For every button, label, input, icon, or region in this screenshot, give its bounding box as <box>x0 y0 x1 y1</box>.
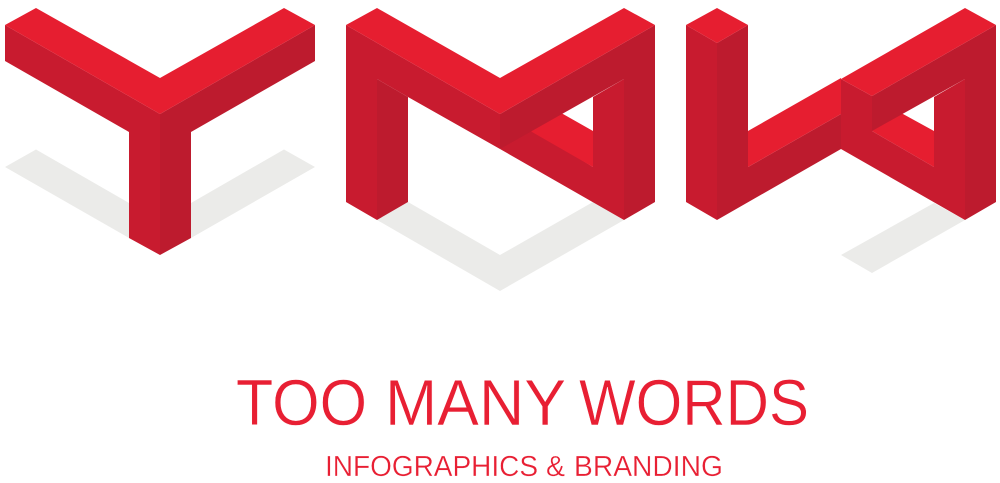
shadow: M letter <box>377 202 624 291</box>
isometric letter Y <box>5 8 315 255</box>
subtitle: & <box>546 451 565 483</box>
shadow: 4 letter <box>841 203 965 273</box>
title: TOO <box>236 366 367 439</box>
subtitle: BRANDING <box>574 451 723 483</box>
isometric letter M <box>346 8 655 220</box>
subtitle <box>325 451 723 483</box>
title <box>236 366 809 439</box>
subtitle: INFOGRAPHICS <box>325 451 538 483</box>
shadow: Y letter <box>5 150 315 238</box>
isometric numeral 4 <box>686 8 996 220</box>
title: MANY <box>385 366 566 439</box>
title: WORDS <box>579 366 809 439</box>
